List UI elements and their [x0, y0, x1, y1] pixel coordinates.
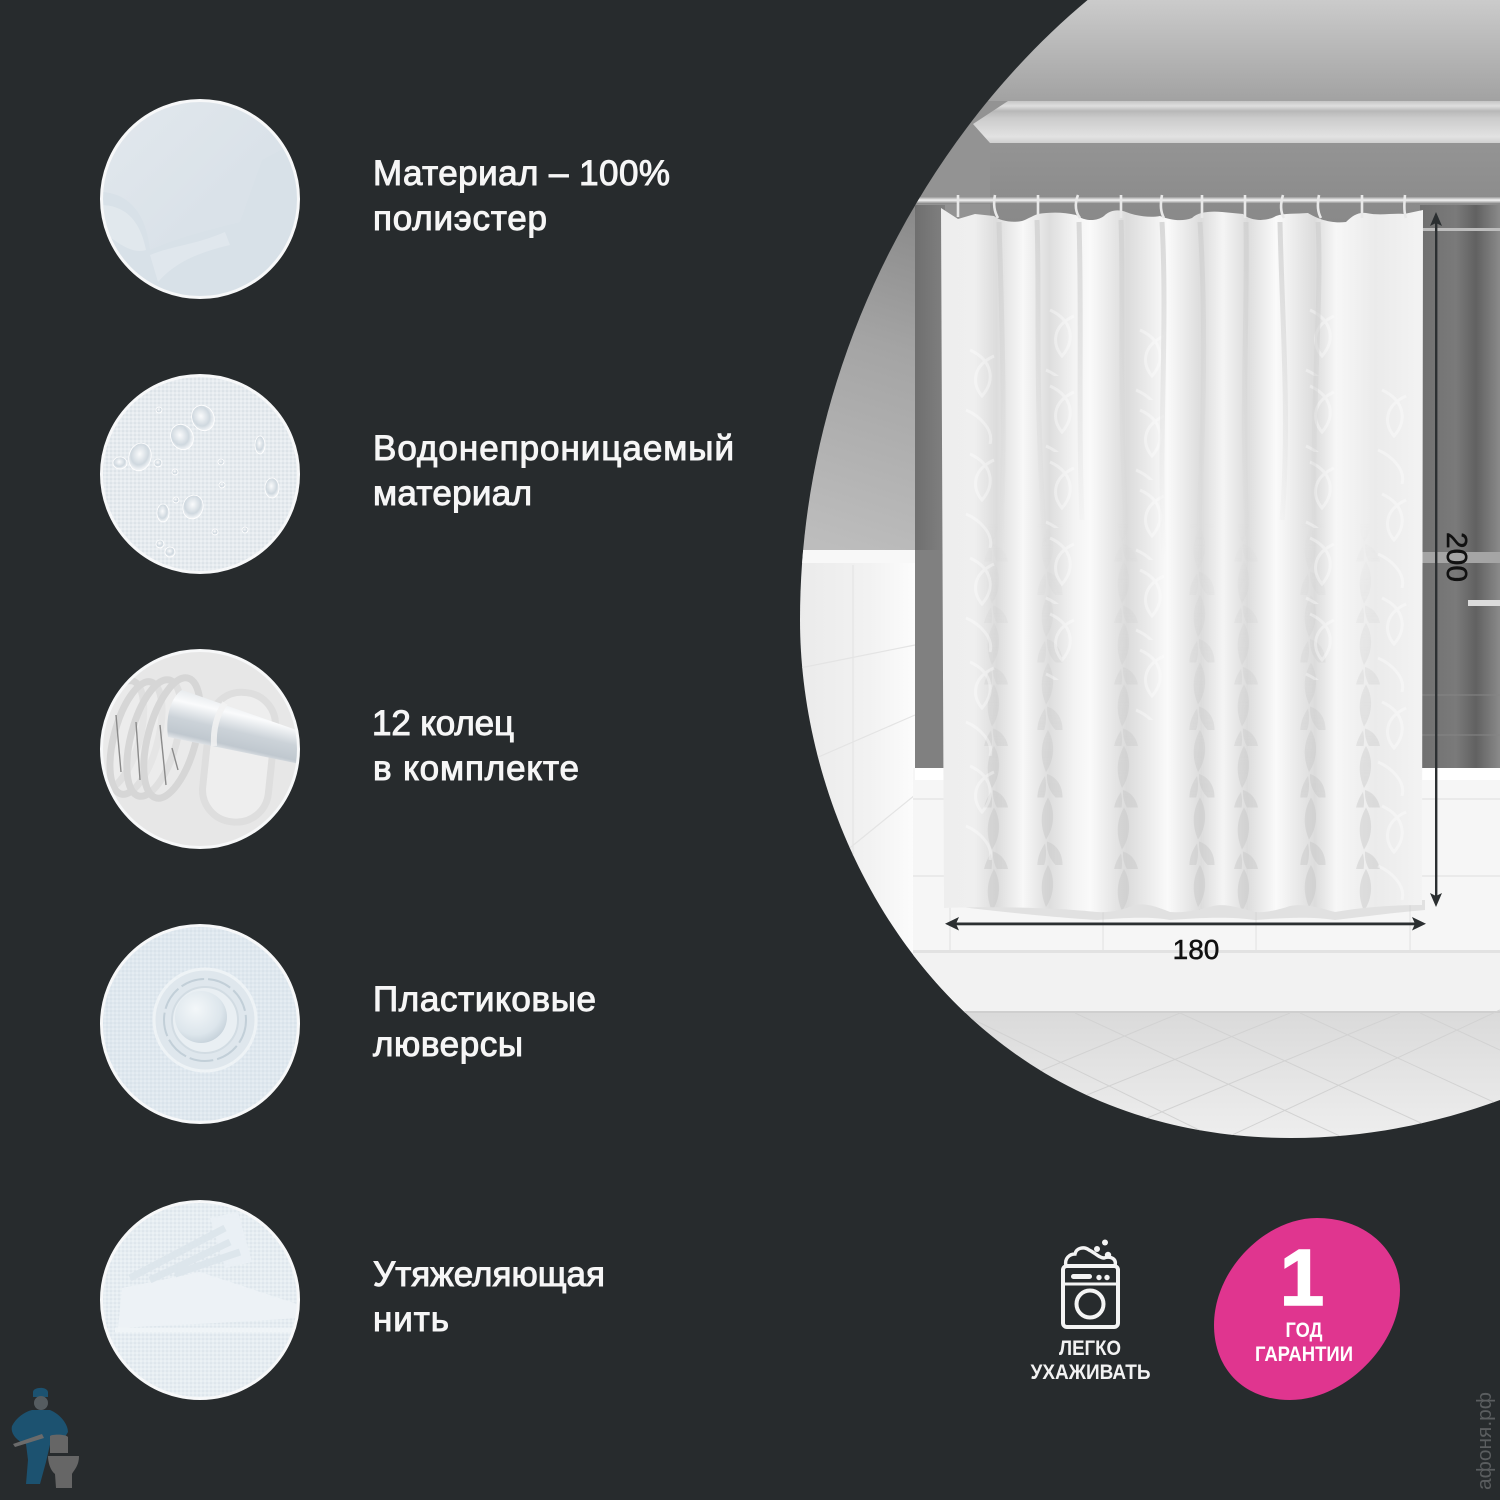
text: material: полиэстер [373, 199, 547, 238]
arrow: curtain height [1430, 212, 1442, 907]
badge: warranty [1214, 1218, 1400, 1400]
shower curtain [935, 200, 1430, 920]
rings on rod swatch photo [100, 649, 300, 849]
left wainscot panel [800, 550, 915, 957]
text: easy care [1030, 1337, 1150, 1384]
text: easy care: УХАЖИВАТЬ [1030, 1361, 1150, 1384]
text: waterproof: Водонепроницаемый [373, 429, 734, 468]
warranty text: ГАРАНТИИ [1255, 1343, 1353, 1366]
pink blob [1214, 1218, 1400, 1400]
floor tiles [966, 1010, 1500, 1138]
upper left wall corner [915, 101, 1008, 219]
fabric swatch photo [100, 99, 300, 300]
height label 200: 200 [1440, 532, 1472, 582]
curtain shadow [945, 900, 1425, 920]
right wall [1420, 205, 1500, 550]
upper wall [990, 143, 1500, 222]
bathtub front panel [913, 768, 1500, 1013]
feature: grommets [100, 924, 596, 1124]
text: weighted thread: нить [373, 1300, 449, 1339]
text: waterproof: материал [373, 474, 532, 513]
cornice moulding [973, 101, 1500, 143]
fold creases [996, 220, 1322, 462]
niche wall left of curtain [915, 205, 945, 550]
left side wall [803, 206, 915, 550]
watermark: афоня.рф [1474, 1392, 1496, 1490]
water drops swatch photo [100, 374, 300, 574]
plastic grommet swatch photo [100, 924, 300, 1124]
text: weighted thread: Утяжеляющая [373, 1255, 605, 1294]
grey floral columns [984, 634, 1380, 910]
curtain rod [915, 197, 1500, 204]
width label 180: 180 [1173, 934, 1219, 965]
text: grommets: люверсы [373, 1025, 523, 1064]
curtain rings [958, 195, 1406, 218]
feature: rings [82, 649, 579, 849]
warranty text [1255, 1319, 1353, 1366]
right wall fitting [1468, 600, 1500, 606]
rail on right wall [1420, 228, 1500, 231]
warranty number: 1 [1280, 1233, 1324, 1322]
icon: washing machine [1063, 1240, 1118, 1327]
text: easy care: ЛЕГКО [1059, 1337, 1121, 1360]
panel: bathroom scene with shower curtain [800, 0, 1500, 1150]
lower right wall [1420, 550, 1500, 769]
arrow: curtain width [945, 917, 1426, 930]
feature: waterproof [100, 374, 734, 574]
weighted hem swatch photo [100, 1200, 300, 1400]
feature: weighted thread [100, 1200, 605, 1400]
ceiling [988, 0, 1500, 101]
badge: easy care [1030, 1240, 1150, 1384]
warranty text: ГОД [1286, 1319, 1323, 1342]
text: material: Материал – 100% [373, 154, 670, 193]
white floral highlights [984, 309, 1380, 868]
logo: plumber with toilet [12, 1388, 79, 1488]
text: rings: в комплекте [373, 749, 579, 788]
feature: material [100, 99, 670, 300]
lower niche wall left [915, 550, 945, 769]
text: grommets: Пластиковые [373, 980, 596, 1019]
text: rings: 12 колец [372, 704, 514, 743]
